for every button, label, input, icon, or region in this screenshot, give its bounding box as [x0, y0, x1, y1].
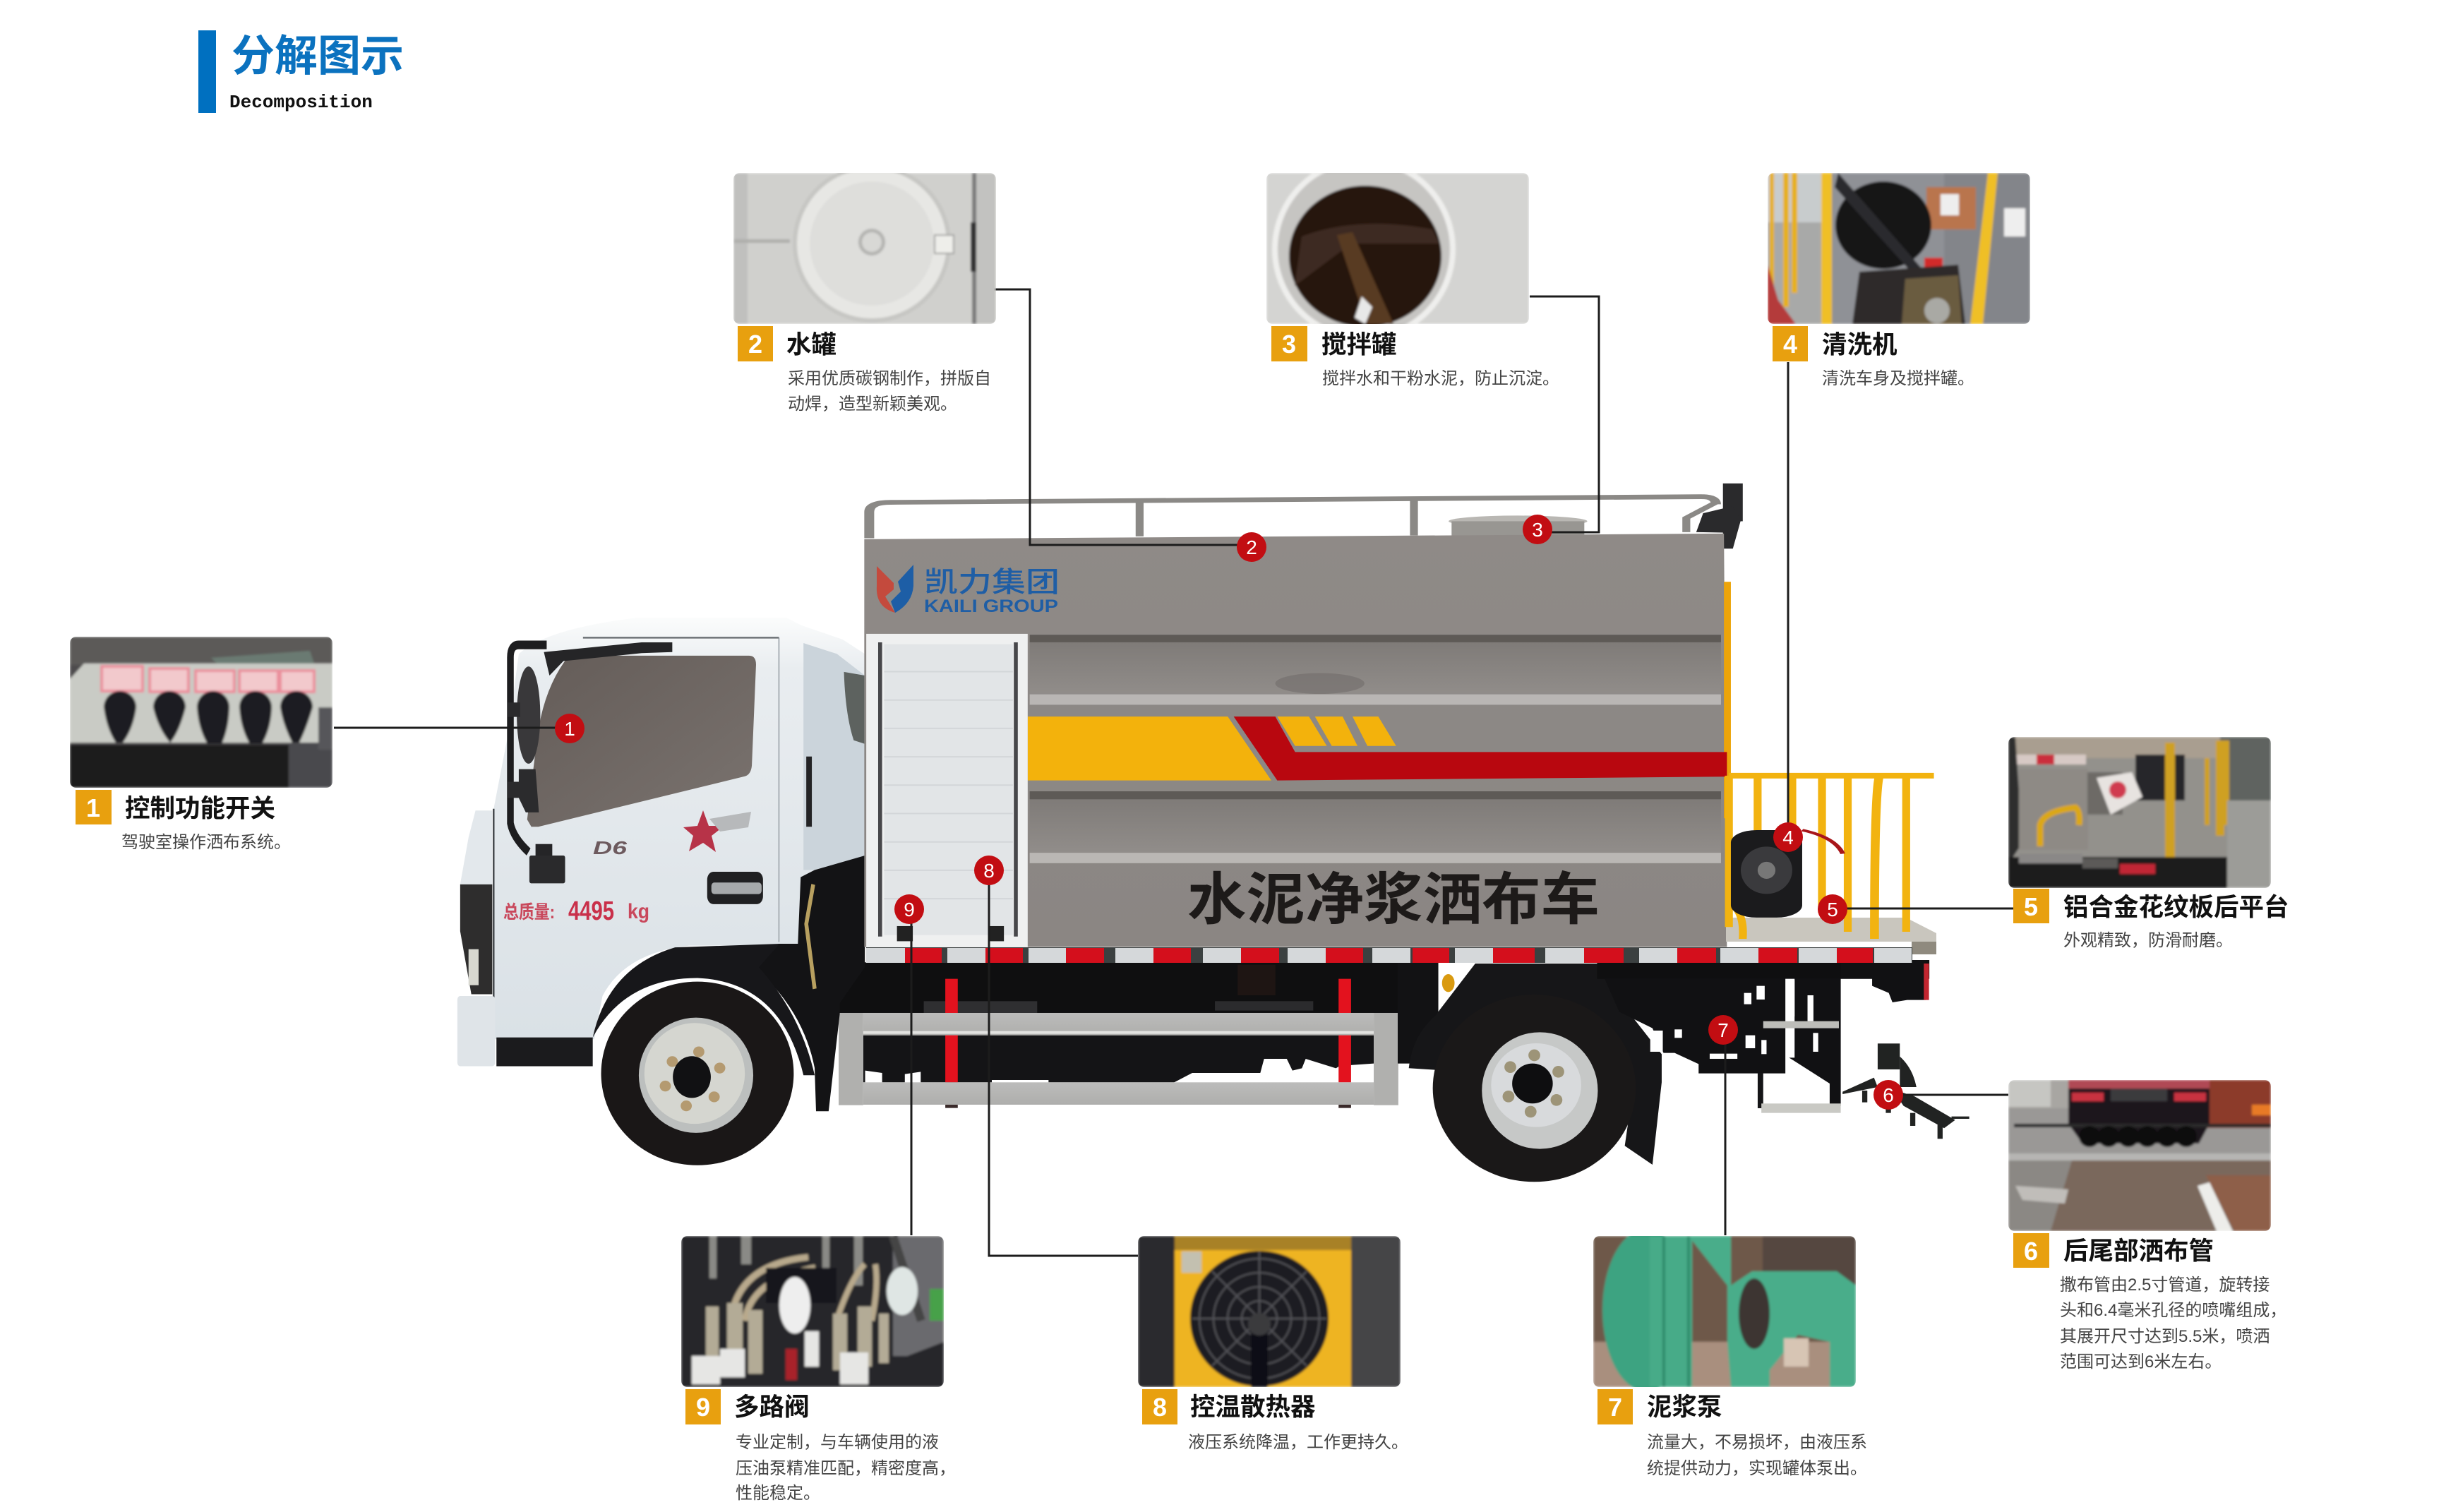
- title block: Decomposition: [229, 92, 373, 113]
- number 7: 7: [1608, 1393, 1622, 1422]
- company logo: KAILI GROUP: [924, 596, 1058, 616]
- rear spray pipe: [1842, 1043, 1970, 1139]
- title block: 分解图示: [232, 32, 404, 80]
- door handle: [707, 872, 763, 904]
- photo: checker plate platform: [2008, 737, 2271, 888]
- tank stripes: [1028, 716, 1727, 781]
- number 8: 8: [1153, 1393, 1167, 1422]
- description 9: 性能稳定。: [736, 1484, 820, 1503]
- marker 1: 1: [564, 718, 575, 740]
- heading 8: 控温散热器: [1190, 1393, 1316, 1421]
- heading 3: 搅拌罐: [1321, 330, 1397, 359]
- number 5: [2013, 889, 2049, 923]
- marker 2: [1237, 532, 1266, 562]
- photo: multi-way valve block: [681, 1236, 944, 1387]
- marker 7: [1708, 1015, 1738, 1045]
- heading 2: 水罐: [786, 330, 837, 359]
- number 2: [738, 326, 773, 361]
- description 2: 动焊，造型新颖美观。: [788, 395, 957, 414]
- marker 6: [1874, 1080, 1903, 1110]
- description 6: 范围可达到6米左右。: [2060, 1352, 2222, 1372]
- marker 4: 4: [1782, 827, 1794, 848]
- rear warning lamp: [1696, 484, 1743, 548]
- number 1: 1: [86, 793, 100, 822]
- number 8: [1142, 1389, 1177, 1424]
- tank body: [864, 534, 1731, 947]
- panel 4: washer: [1768, 173, 2030, 388]
- number 3: 3: [1282, 330, 1296, 359]
- marker 3: 3: [1532, 519, 1543, 541]
- tank lettering: 水泥净浆洒布车: [1187, 868, 1600, 931]
- marker 6: 6: [1883, 1084, 1894, 1106]
- panel 2: water tank: [733, 164, 996, 414]
- platform railing: [1727, 776, 1934, 939]
- description 1: 驾驶室操作洒布系统。: [121, 833, 291, 852]
- heading 1: 控制功能开关: [125, 794, 275, 822]
- hose reel: [1731, 830, 1842, 918]
- cab window: [527, 656, 756, 827]
- marker 4: [1773, 822, 1803, 852]
- heading 7: 泥浆泵: [1647, 1393, 1722, 1421]
- description 5: 外观精致，防滑耐磨。: [2063, 931, 2233, 950]
- rear fender: [1398, 960, 1662, 1165]
- number 4: [1773, 326, 1808, 361]
- front wheel: [593, 944, 815, 1165]
- roller shutter door: [866, 634, 1028, 947]
- photo: radiator fan: [1138, 1236, 1401, 1387]
- number 6: [2013, 1233, 2049, 1268]
- title block: [198, 30, 404, 113]
- marker 5: 5: [1827, 899, 1838, 920]
- number 4: 4: [1783, 330, 1797, 359]
- description 6: 撒布管由2.5寸管道，旋转接: [2060, 1276, 2270, 1295]
- marker 2: 2: [1246, 536, 1257, 558]
- panel 6: rear spray pipe: [2008, 1080, 2286, 1372]
- slurry pump frame and steps: [1597, 960, 1929, 1113]
- number 2: 2: [748, 330, 762, 359]
- rear wheel: [1433, 974, 1636, 1182]
- description 3: 搅拌水和干粉水泥，防止沉淀。: [1322, 369, 1559, 388]
- marker 9: 9: [904, 899, 915, 920]
- cab decals: [503, 810, 751, 926]
- description 4: 清洗车身及搅拌罐。: [1822, 369, 1974, 388]
- rear platform: [1726, 918, 1936, 954]
- number 9: 9: [696, 1393, 710, 1422]
- number 3: [1271, 326, 1307, 361]
- marker 7: 7: [1717, 1019, 1729, 1041]
- cab: [457, 618, 865, 1111]
- panel 5: rear platform: [2008, 737, 2289, 950]
- description 6: 其展开尺寸达到5.5米，喷洒: [2060, 1327, 2270, 1346]
- panel 1: control switches: [70, 637, 332, 852]
- photo: green pump: [1593, 1229, 1856, 1391]
- tank rails: [869, 497, 1716, 539]
- marker 5: [1818, 894, 1847, 924]
- marker 9: [894, 894, 924, 924]
- number 7: [1597, 1389, 1633, 1424]
- marker 1: [555, 714, 584, 743]
- description 9: 压油泵精准匹配，精密度高，: [736, 1459, 956, 1478]
- truck illustration: [457, 484, 1970, 1182]
- description 7: 统提供动力，实现罐体泵出。: [1647, 1459, 1867, 1478]
- photo: tank lid: [733, 164, 996, 324]
- cab decals: kg: [628, 900, 649, 923]
- heading 9: 多路阀: [734, 1393, 810, 1421]
- marker 3: [1523, 515, 1552, 544]
- description 8: 液压系统降温，工作更持久。: [1188, 1433, 1408, 1452]
- cab decals: D6: [593, 837, 628, 858]
- reflective stripe: [866, 947, 1912, 963]
- number 9: [685, 1389, 721, 1424]
- panel 8: temperature radiator: [1138, 1236, 1408, 1452]
- heading 6: 后尾部洒布管: [2063, 1237, 2214, 1265]
- number 6: 6: [2024, 1237, 2038, 1266]
- marker 8: 8: [983, 860, 995, 882]
- chassis frame: [833, 962, 1426, 1013]
- photo: mixing tank opening: [1266, 173, 1529, 324]
- photo: switch panel: [70, 637, 332, 788]
- leader lines: [334, 289, 2013, 1256]
- panel 3: mixing tank: [1266, 173, 1549, 386]
- tank hatch: [1449, 515, 1588, 536]
- side guard: [839, 979, 1398, 1108]
- number 5: 5: [2024, 892, 2038, 921]
- description 6: 头和6.4毫米孔径的喷嘴组成，: [2060, 1301, 2286, 1320]
- heading 4: 清洗机: [1822, 330, 1898, 359]
- photo: spraying pipe: [2008, 1080, 2271, 1231]
- company logo: [877, 565, 1060, 616]
- heading 5: 铝合金花纹板后平台: [2063, 893, 2289, 921]
- panel 7: slurry pump: [1593, 1229, 1867, 1478]
- description 2: 采用优质碳钢制作，拼版自: [788, 369, 991, 388]
- cab decals: 4495: [568, 896, 614, 926]
- number 1: [76, 790, 112, 824]
- photo: high pressure washer: [1768, 173, 2030, 324]
- underbody tanks: [863, 1036, 1374, 1083]
- description 9: 专业定制，与车辆使用的液: [736, 1433, 939, 1452]
- cab decals: 总质量:: [503, 901, 555, 923]
- mirrors: [508, 642, 672, 883]
- panel 9: multi-way valve: [681, 1236, 956, 1503]
- company logo: 凯力集团: [924, 567, 1060, 598]
- description 7: 流量大，不易损坏，由液压系: [1647, 1433, 1867, 1452]
- marker 8: [974, 856, 1004, 885]
